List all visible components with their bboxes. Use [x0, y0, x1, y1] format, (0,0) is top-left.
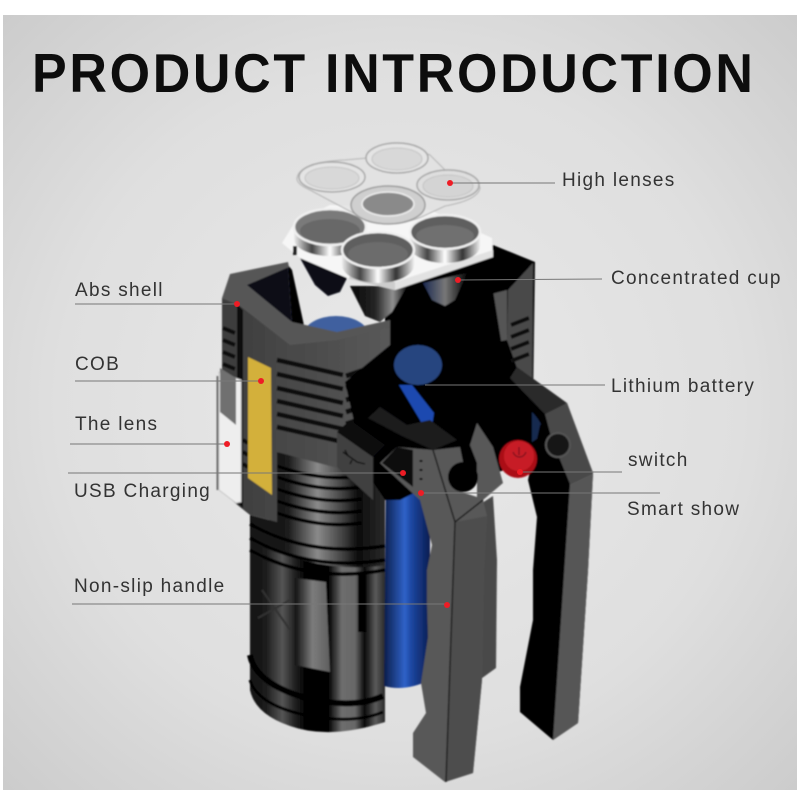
barrel neck with ribs — [250, 452, 385, 574]
right handle — [510, 367, 593, 740]
side lens — [218, 368, 241, 503]
callout: The lens — [70, 414, 230, 447]
callout: COB: COB — [75, 354, 120, 375]
callout: Smart show — [418, 490, 740, 520]
left cavity of shell — [240, 265, 369, 356]
concentrating cones — [300, 258, 467, 322]
head front face — [222, 262, 390, 522]
callout: The lens: The lens — [75, 414, 158, 435]
callout: Non-slip handle: Non-slip handle — [74, 576, 226, 597]
callout: switch: switch — [628, 450, 689, 471]
callout: High lenses — [447, 170, 676, 191]
callout: COB — [75, 354, 264, 384]
right shell, rear — [385, 245, 535, 430]
callout: High lenses: High lenses — [562, 170, 676, 191]
COB yellow panel — [248, 357, 272, 495]
central cavity dark — [345, 290, 567, 500]
title: PRODUCT INTRODUCTION — [32, 43, 753, 104]
lower barrel — [250, 520, 385, 732]
callout: Non-slip handle — [72, 576, 450, 608]
reflector cups — [294, 209, 480, 283]
reflector plate — [282, 205, 493, 290]
callout: Smart show: Smart show — [627, 499, 740, 520]
callout: switch — [517, 450, 689, 475]
left handle — [368, 407, 503, 782]
callout: Lithium battery: Lithium battery — [611, 376, 755, 397]
callout: Abs shell — [75, 280, 240, 307]
callout: USB Charging — [68, 470, 406, 502]
USB port cover — [337, 420, 385, 500]
callout: Abs shell: Abs shell — [75, 280, 164, 301]
clear lens plate — [297, 143, 480, 224]
callout: USB Charging: USB Charging — [74, 481, 211, 502]
flashlight exploded view — [218, 143, 593, 782]
callout: Concentrated cup — [455, 268, 782, 289]
battery column — [384, 470, 430, 688]
callout: Concentrated cup: Concentrated cup — [611, 268, 782, 289]
red switch button — [499, 440, 537, 478]
rear grip column — [455, 496, 497, 681]
